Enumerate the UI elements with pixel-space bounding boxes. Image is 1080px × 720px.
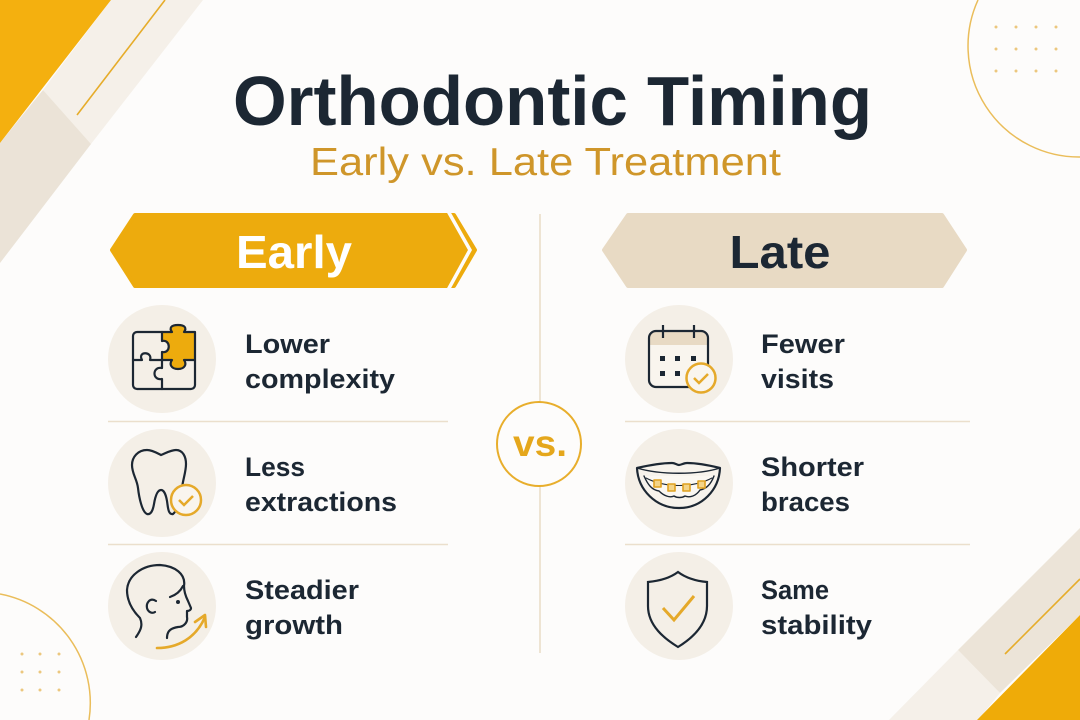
panel: early [108, 211, 475, 660]
decoration: top-right circle with dots [968, 0, 1080, 157]
row: lower complexity: Lower [245, 329, 331, 359]
header banner: late: Late [730, 226, 830, 278]
row: shorter braces: Shorter [761, 452, 865, 482]
title: Orthodontic Timing [233, 62, 872, 140]
vs. badge [497, 402, 581, 486]
decoration: bottom-right diagonal bands [889, 528, 1080, 720]
header banner: early [112, 211, 475, 290]
decoration: top-left diagonal bands [0, 0, 203, 263]
icon: smile with braces [637, 463, 720, 508]
center divider [539, 214, 541, 653]
header banner: late [604, 215, 965, 286]
row: less extractions: extractions [245, 487, 397, 517]
row: steadier growth [108, 552, 360, 660]
row: steadier growth: Steadier [245, 575, 360, 605]
row: same stability: Same [761, 575, 829, 605]
icon: head profile with arrow [127, 565, 206, 648]
decoration: bottom-left circle with dots [0, 594, 90, 720]
row: steadier growth: growth [245, 610, 343, 640]
header banner: early: Early [236, 226, 352, 278]
subtitle: Early vs. Late Treatment [310, 141, 781, 184]
row: lower complexity [108, 305, 395, 413]
vs. badge: vs. [513, 423, 567, 464]
row: fewer visits: Fewer [761, 329, 846, 359]
icon: puzzle [133, 325, 195, 389]
row: shorter braces: braces [761, 487, 850, 517]
row: same stability [625, 552, 872, 660]
row: same stability: stability [761, 610, 872, 640]
row: less extractions [108, 429, 397, 537]
row: lower complexity: complexity [245, 364, 395, 394]
row: shorter braces [625, 429, 865, 537]
icon: calendar with check [649, 325, 716, 392]
row: fewer visits [625, 305, 846, 413]
panel: late [604, 215, 970, 660]
row: less extractions: Less [245, 452, 305, 482]
row: fewer visits: visits [761, 364, 834, 394]
icon: tooth with check [132, 450, 201, 515]
icon: shield with check [648, 572, 707, 647]
